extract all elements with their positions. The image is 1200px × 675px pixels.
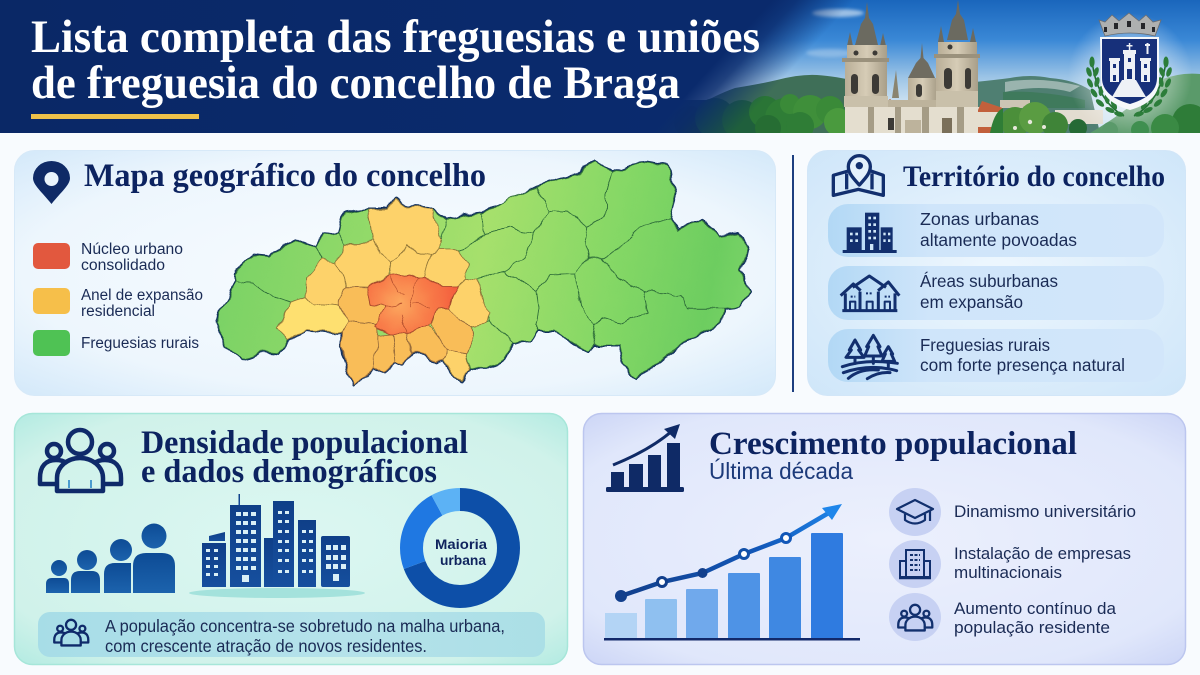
legend: Anel de expansão [81, 287, 203, 304]
row: rural parishes [828, 329, 1164, 382]
row: rural parishes: com forte presença natural [920, 355, 1125, 375]
left tower [855, 2, 878, 45]
factor: university: Dinamismo universitário [954, 502, 1136, 521]
laurel [1085, 56, 1173, 118]
icon: trees and fields [842, 335, 897, 379]
title: de freguesia do concelho de Braga [31, 57, 680, 109]
icon: graduation cap [897, 500, 933, 524]
icon: rising bars with arrow [606, 424, 684, 492]
row: urban zones [828, 204, 1164, 257]
title [31, 11, 760, 109]
row: rural parishes: Freguesias rurais [920, 335, 1050, 355]
coat of arms [1085, 13, 1173, 118]
row: suburban areas: em expansão [920, 292, 1023, 312]
row: urban zones: Zonas urbanas [920, 209, 1039, 229]
legend: consolidado [81, 257, 165, 274]
factor: companies: multinacionais [954, 563, 1062, 582]
panel: density [14, 414, 568, 664]
heading: map: Mapa geográfico do concelho [84, 158, 486, 194]
legend [33, 241, 203, 356]
header banner [0, 0, 1200, 142]
center tower [908, 43, 935, 78]
factor: companies: Instalação de empresas [954, 544, 1131, 563]
panel: territory [808, 150, 1186, 396]
right tower [947, 0, 968, 40]
icon: map pin [33, 161, 70, 204]
legend: Núcleo urbano [81, 241, 183, 258]
heading: density: Densidade populacional [141, 425, 468, 461]
icon: folded map with pin [833, 156, 883, 195]
donut chart: urbana [440, 552, 486, 568]
title underline [31, 114, 199, 119]
panel: growth [584, 414, 1186, 664]
panel: map [14, 150, 776, 396]
title: Lista completa das freguesias e uniões [31, 11, 760, 63]
bar chart with trend line [604, 504, 860, 640]
legend: residencial [81, 303, 155, 320]
heading: density [141, 425, 468, 490]
scenery: sky, hills and trees [681, 0, 1200, 133]
row: suburban areas [828, 266, 1164, 320]
shield [1100, 37, 1159, 110]
heading: growth: Crescimento populacional [709, 426, 1077, 462]
donut chart [412, 500, 508, 596]
factor: population [889, 593, 1117, 641]
donut chart: Maioria [435, 536, 487, 552]
callout bar [38, 612, 545, 657]
icon: group of people [40, 430, 121, 491]
divider [792, 155, 794, 392]
heading: territory: Território do concelho [903, 160, 1165, 193]
heading: density: e dados demográficos [141, 454, 437, 490]
choropleth map of Braga [215, 160, 750, 385]
factor: population: população residente [954, 618, 1110, 637]
row: urban zones: altamente povoadas [920, 230, 1077, 250]
city skyline [189, 494, 365, 598]
callout bar: A população concentra-se sobretudo na malha urbana, [105, 616, 505, 636]
factor: university [889, 488, 1136, 536]
scenery: church with two towers [842, 0, 1003, 133]
heading: growth [709, 426, 1077, 484]
icon: office building [899, 550, 931, 578]
row: suburban areas: Áreas suburbanas [920, 271, 1058, 291]
heading: growth: Última década [709, 458, 853, 484]
factor: population: Aumento contínuo da [954, 599, 1117, 618]
legend: Freguesias rurais [81, 335, 199, 352]
icon: small people [54, 620, 88, 645]
mural crown [1099, 13, 1161, 36]
icon: buildings [843, 213, 897, 253]
factor: companies [889, 540, 1131, 588]
icon: people [898, 605, 932, 630]
icon: houses [841, 276, 899, 311]
people silhouettes [46, 524, 175, 593]
callout bar: com crescente atração de novos residentes. [105, 636, 427, 656]
